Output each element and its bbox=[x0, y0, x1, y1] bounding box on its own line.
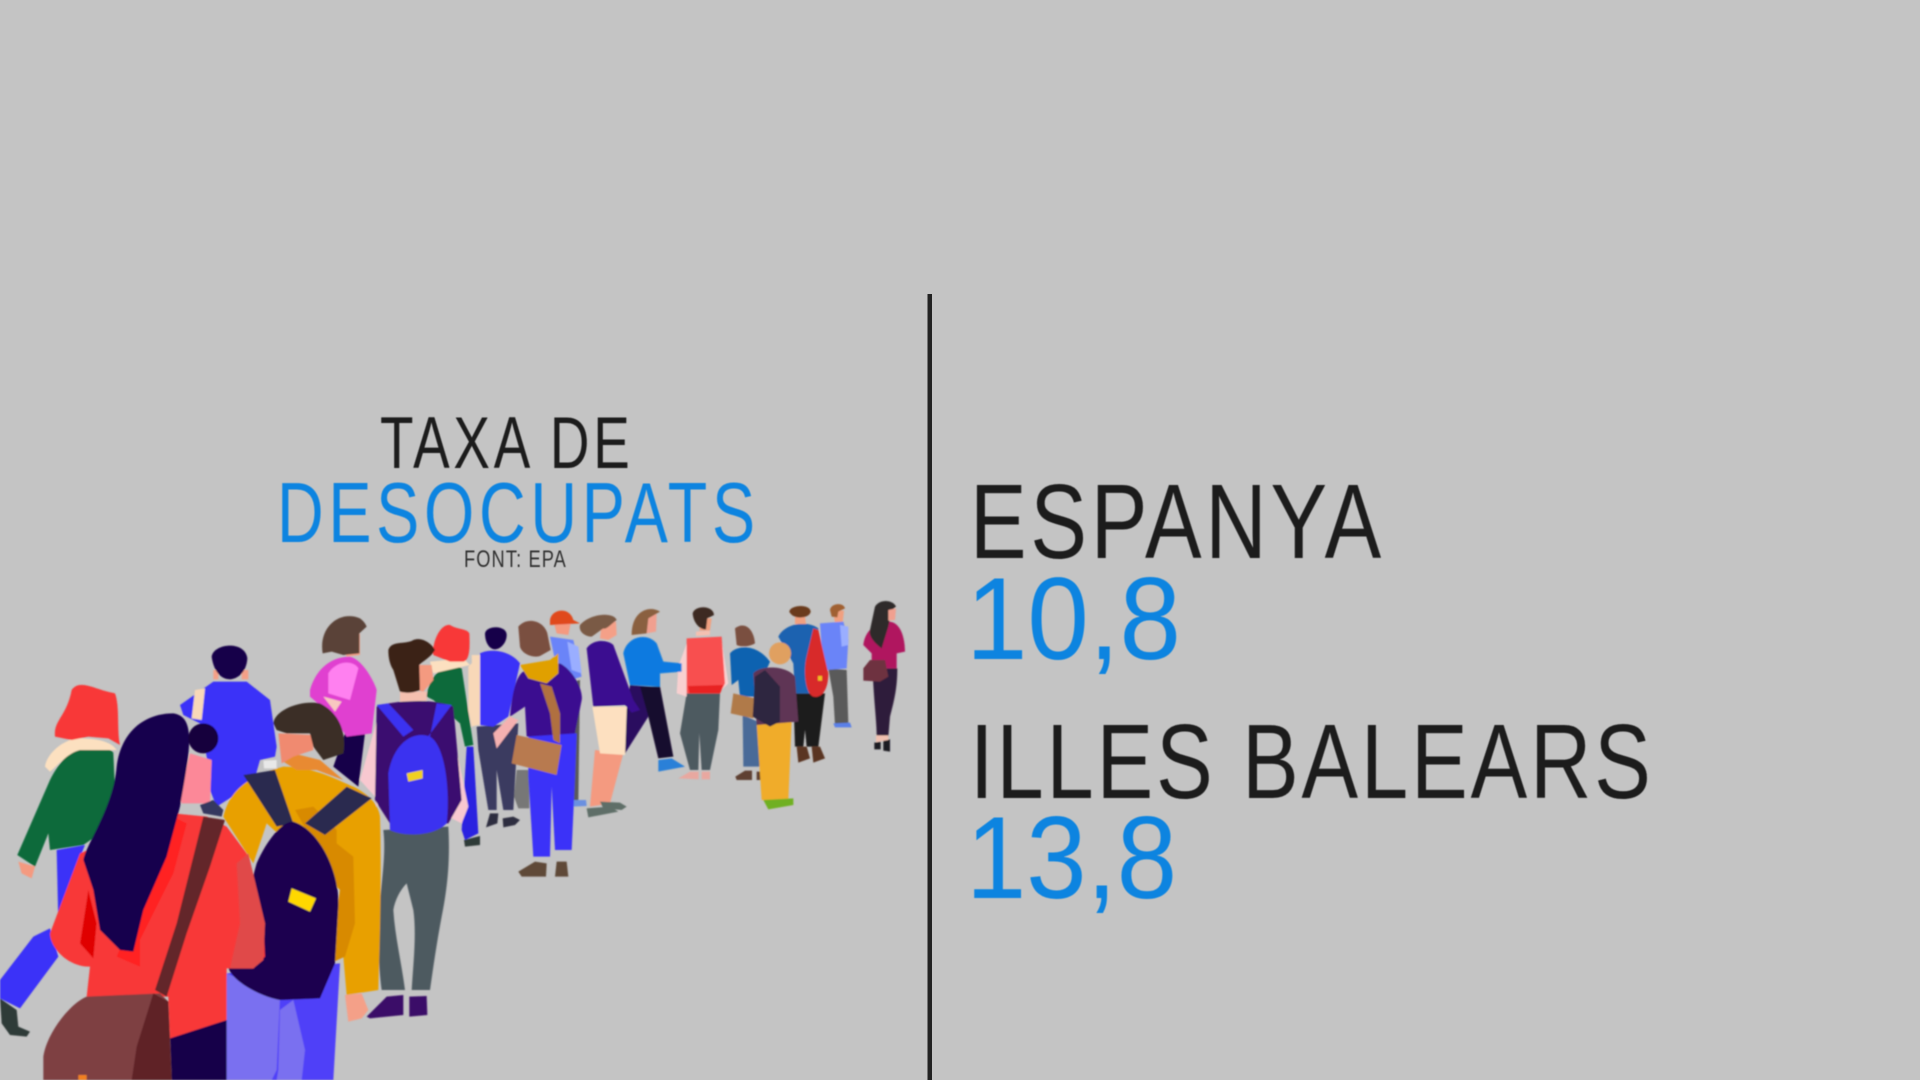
person: woman in bright blue top bbox=[623, 609, 685, 772]
person: man in light blue shirt bbox=[820, 604, 852, 727]
person: man in blue shirt and dark trousers bbox=[468, 627, 520, 827]
value: 10,8: 10,8 bbox=[966, 553, 1181, 684]
near half of the queue bbox=[0, 616, 480, 1080]
vertical divider line bbox=[928, 294, 932, 1080]
statistics: Illes Balears bbox=[966, 703, 1651, 923]
label: Illes Balears: ILLES BALEARS bbox=[970, 703, 1651, 821]
person: person with blue backpack bbox=[360, 639, 468, 1018]
person: man in royal blue shirt bbox=[180, 646, 277, 807]
illustration: queue of people bbox=[0, 601, 905, 1080]
person: man in yellow jacket with navy backpack bbox=[223, 703, 381, 1080]
person: woman in red jacket with brown bag bbox=[43, 713, 265, 1080]
person: woman with yellow scarf and satchel bbox=[493, 621, 582, 877]
person: red-haired woman in green jacket bbox=[0, 685, 120, 1037]
statistics: Espanya bbox=[966, 463, 1381, 684]
grey leg in the background bbox=[514, 770, 529, 808]
person: woman in magenta bbox=[863, 601, 905, 752]
person: person in pink top bbox=[310, 616, 377, 787]
title block bbox=[277, 402, 755, 573]
far half of the queue bbox=[468, 601, 905, 877]
title line: TAXA DE: TAXA DE bbox=[380, 402, 630, 484]
title line: DESOCUPATS: DESOCUPATS bbox=[277, 465, 755, 560]
person: woman in blue jacket with satchel bbox=[730, 625, 770, 780]
person: man in cap behind the queue bbox=[550, 611, 587, 807]
label: Espanya: ESPANYA bbox=[970, 463, 1381, 581]
person: person with yellow trousers bbox=[753, 642, 798, 809]
person: red-haired person in green jacket, far bbox=[427, 625, 480, 847]
person: woman with red backpack bbox=[778, 606, 828, 763]
source note: FONT: EPA bbox=[464, 546, 567, 573]
person: man in red vest bbox=[677, 607, 728, 779]
value: 13,8: 13,8 bbox=[966, 792, 1177, 923]
person: woman in purple top and beige skirt bbox=[580, 615, 640, 817]
